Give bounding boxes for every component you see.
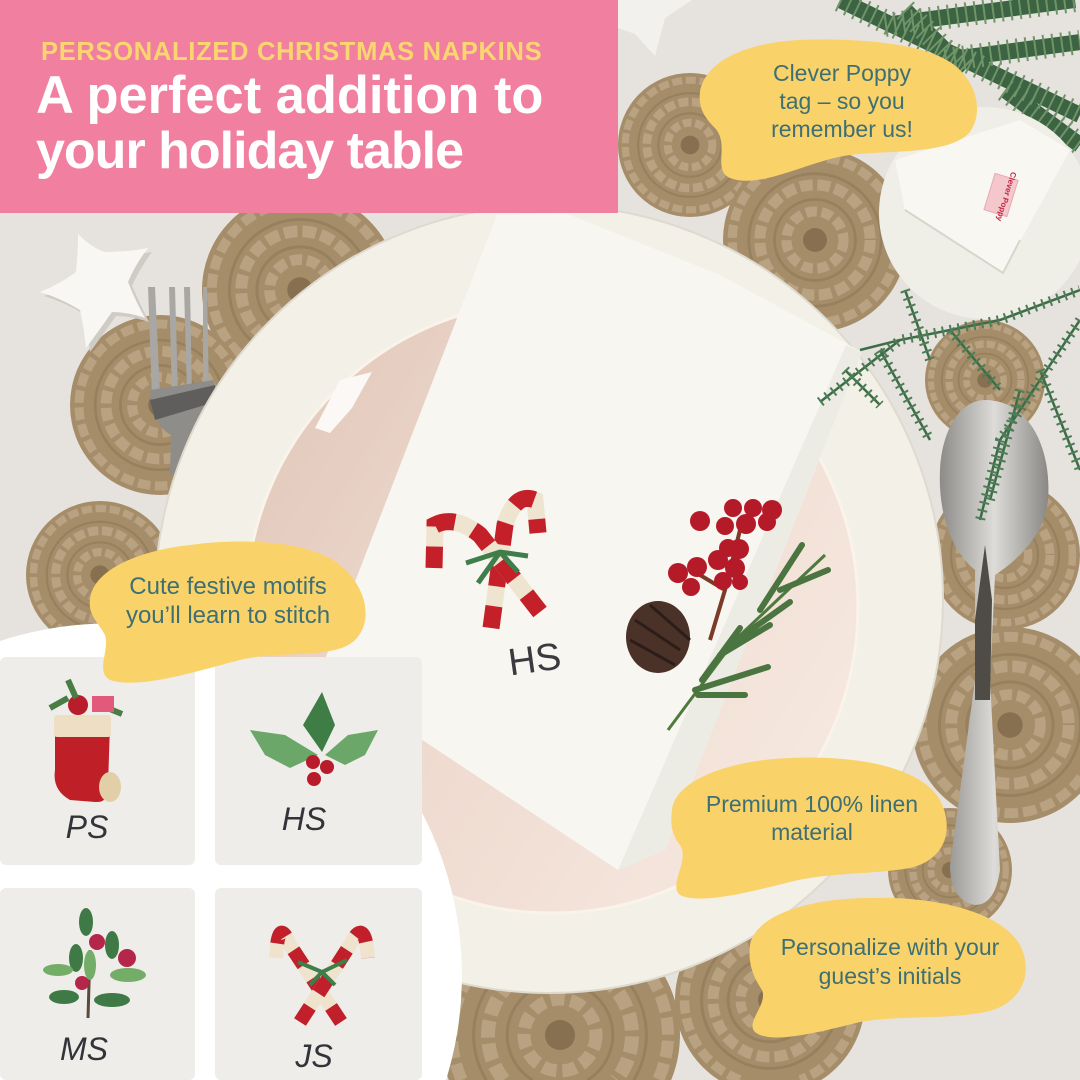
napkin xyxy=(320,213,862,870)
motif card: stocking PS: PS xyxy=(66,809,108,845)
panel: lower-left motif circle xyxy=(0,623,462,1080)
callout: Clever Poppy tag: Clever Poppy xyxy=(773,60,912,86)
star ornament: top xyxy=(618,0,692,56)
callout: personalize initials: guest’s initials xyxy=(819,963,961,989)
title: A perfect addition to xyxy=(36,67,543,125)
callout: festive motifs: you’ll learn to stitch xyxy=(126,602,330,629)
fork xyxy=(148,287,217,475)
star ornament: left xyxy=(40,234,152,352)
motif card: berries MS xyxy=(0,888,195,1080)
motif card: berries MS: MS xyxy=(60,1031,108,1067)
motif card: stocking PS xyxy=(0,657,195,865)
callout: personalize initials: Personalize with your xyxy=(781,934,1000,960)
callout: personalize initials xyxy=(750,898,1026,1037)
callout: Clever Poppy tag xyxy=(700,40,977,181)
spoon at right xyxy=(940,400,1048,905)
berries and rosemary sprig xyxy=(626,499,828,730)
callout: festive motifs: Cute festive motifs xyxy=(129,573,327,600)
evergreen sprig: lower xyxy=(820,290,1080,520)
callout: Clever Poppy tag: remember us! xyxy=(771,116,913,142)
embroidery: candy canes with initials: HS xyxy=(506,635,564,684)
cane right xyxy=(491,498,538,628)
motif card: holly HS: HS xyxy=(282,801,326,837)
embroidery: candy canes with initials xyxy=(434,498,564,684)
inset circle: Clever Poppy tag photo: Clever Poppy xyxy=(994,171,1018,223)
motif card: candy canes JS xyxy=(215,888,422,1080)
callout: Clever Poppy tag: tag – so you xyxy=(779,88,905,114)
plate: inner pink xyxy=(246,301,858,913)
motif card: holly HS xyxy=(215,657,422,865)
callout: premium linen: material xyxy=(771,819,853,845)
subtitle: PERSONALIZED CHRISTMAS NAPKINS xyxy=(41,38,542,66)
banner: pink header xyxy=(0,0,618,213)
callout: premium linen: Premium 100% linen xyxy=(706,791,918,817)
motif card: candy canes JS: JS xyxy=(294,1038,333,1074)
plate: outer white xyxy=(155,205,943,993)
cane left xyxy=(434,522,540,612)
callout: festive motifs xyxy=(90,542,366,683)
banner: pink header: your holiday table xyxy=(36,122,464,180)
plate highlight xyxy=(315,372,372,433)
inset circle: Clever Poppy tag photo xyxy=(879,107,1080,319)
callout: premium linen xyxy=(671,757,947,899)
evergreen sprig: top xyxy=(840,0,1080,145)
